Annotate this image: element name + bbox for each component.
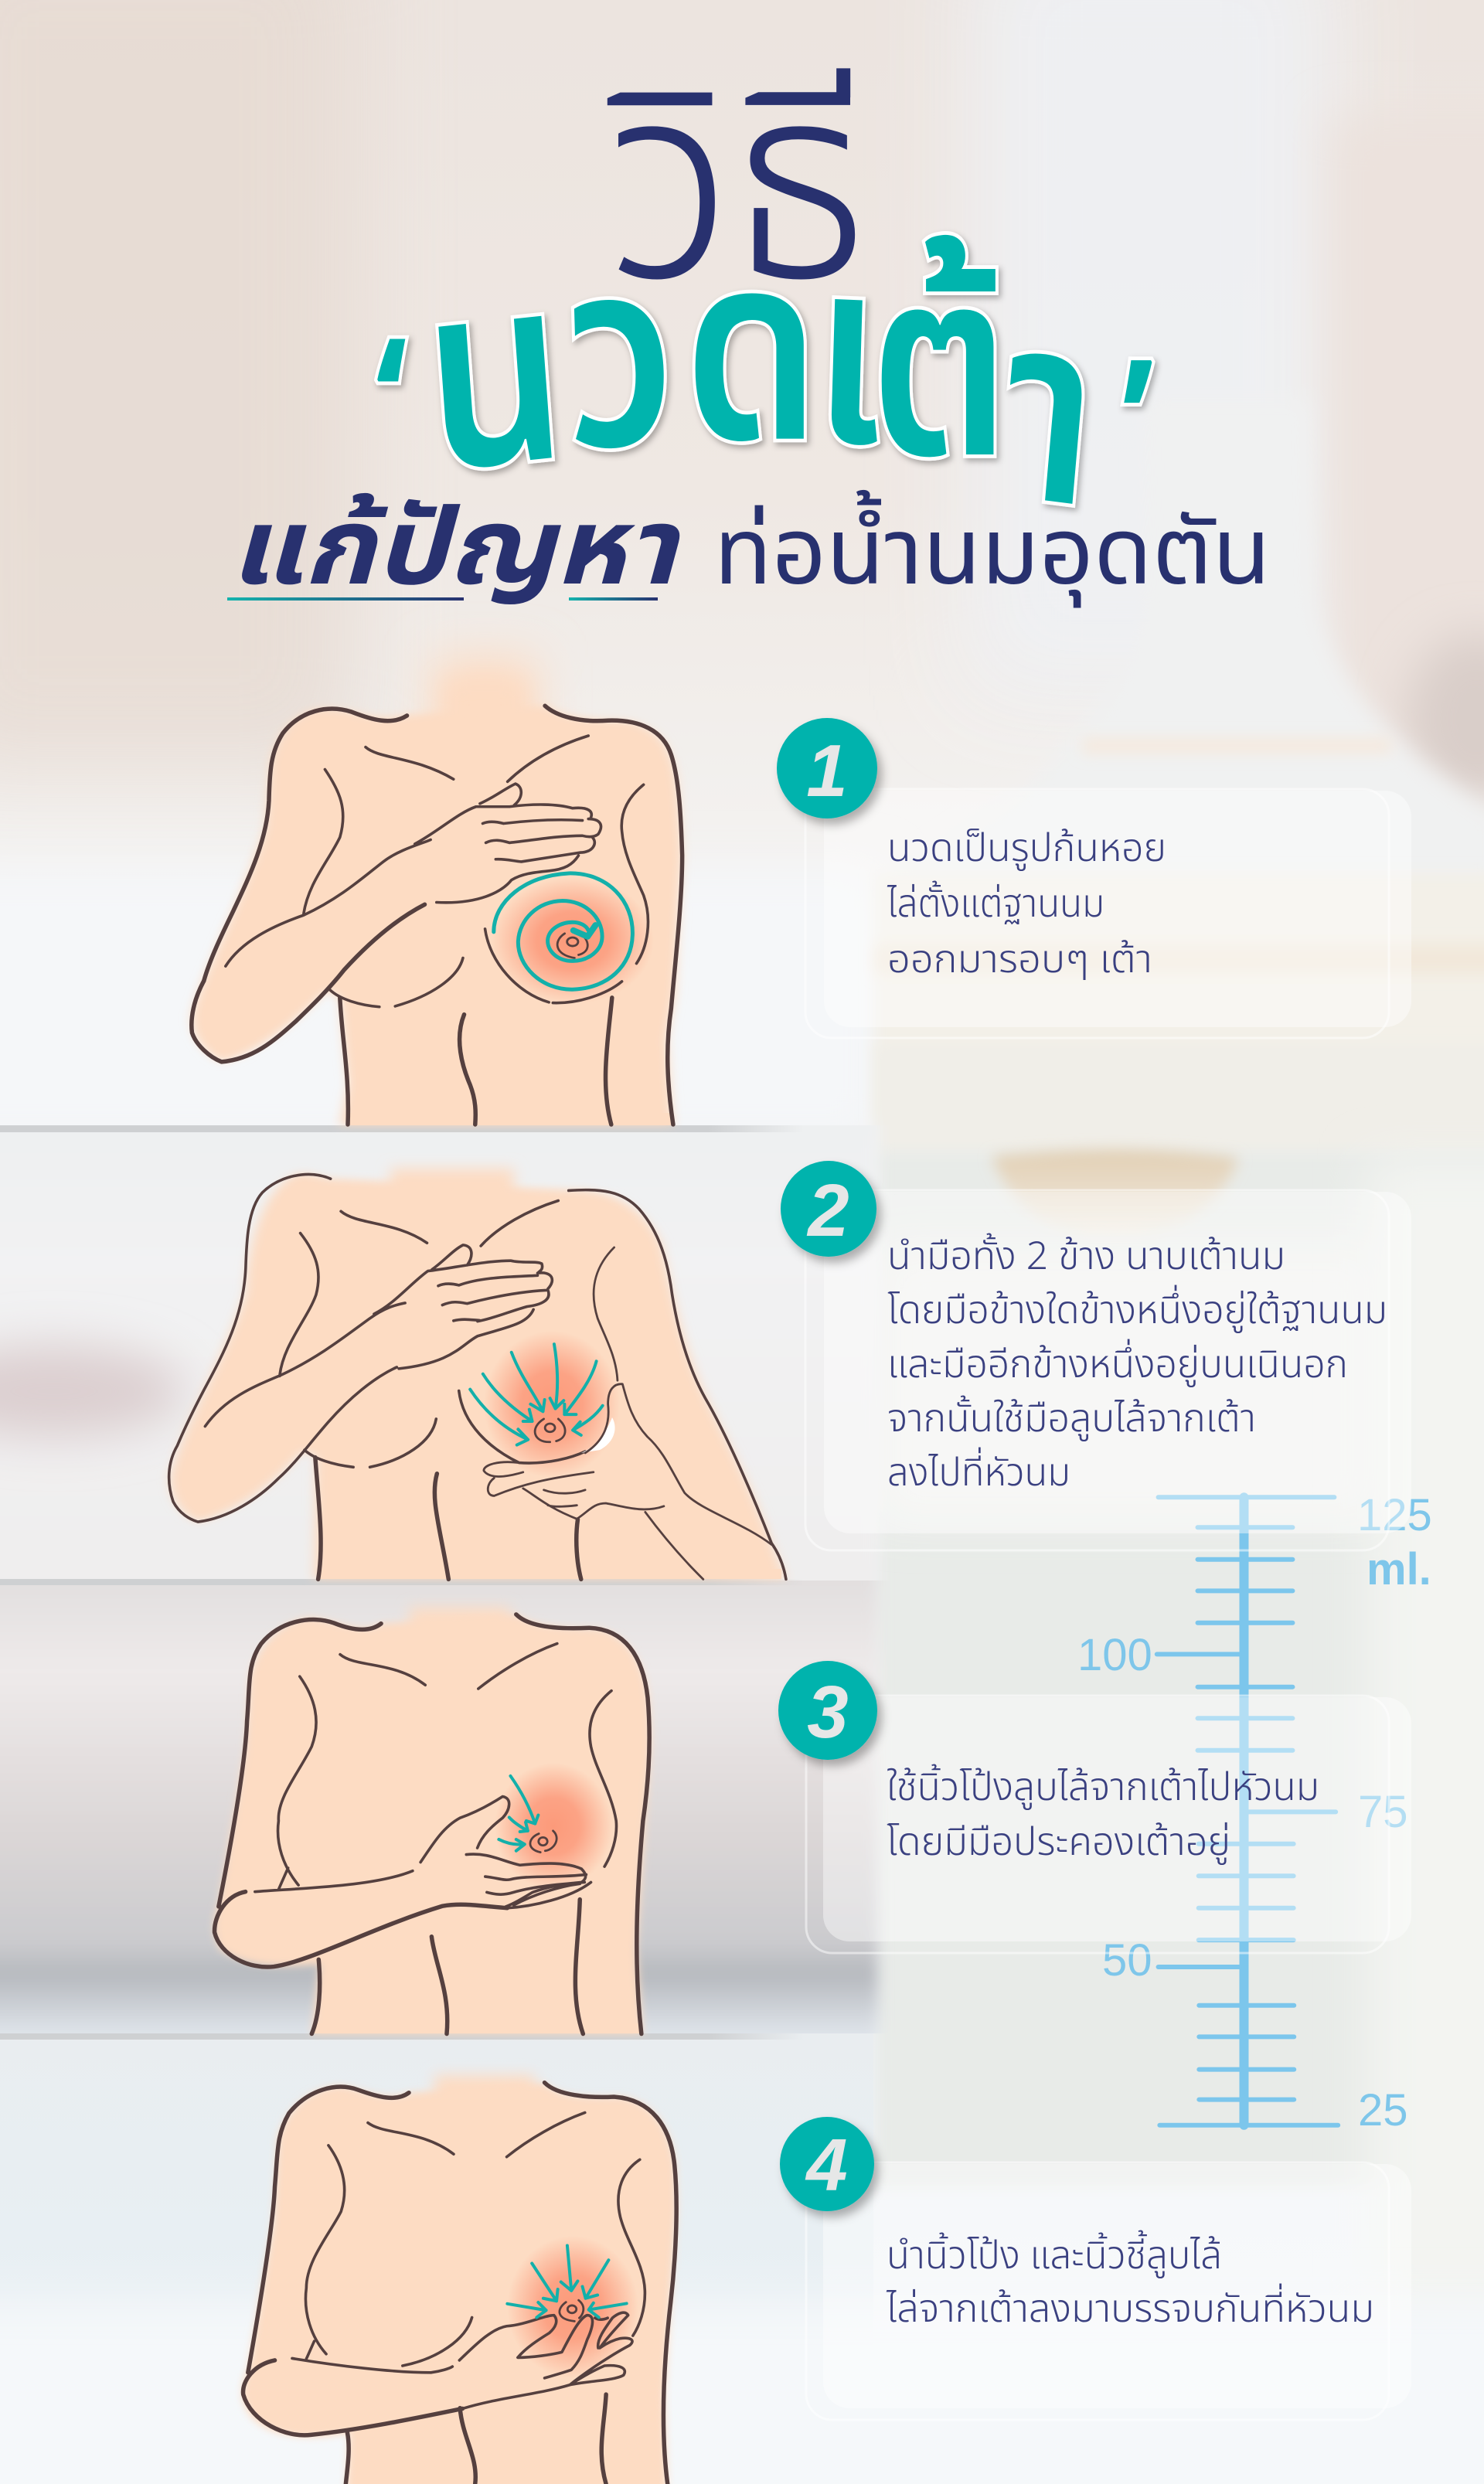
step 1 badge bbox=[777, 718, 877, 818]
step 1 badge: 1 bbox=[806, 730, 848, 812]
panel: step 4 bbox=[780, 2117, 1411, 2420]
figure 1: spiral massage illustration bbox=[192, 657, 682, 1125]
title: นวดเต้า with quotes: น bbox=[413, 182, 578, 587]
step 4 badge: 4 bbox=[805, 2124, 848, 2207]
step 2 badge bbox=[781, 1161, 876, 1257]
title underline accents bbox=[227, 597, 658, 601]
step 2 text: นำมือทั้ง 2 ข้าง นาบเต้านม bbox=[887, 1228, 1285, 1287]
bottle measuring scale bbox=[1077, 1490, 1432, 2135]
step 3 badge: 3 bbox=[807, 1671, 849, 1754]
step 2 text: จากนั้นใช้มือลูบไล้จากเต้า bbox=[887, 1390, 1256, 1449]
step 3 text: ใช้นิ้วโป้งลูบไล้จากเต้าไปหัวนม bbox=[887, 1759, 1319, 1818]
bottle measuring scale: 125 bbox=[1357, 1490, 1432, 1540]
title: ท่อน้ำนมอุดตัน: ท่อน้ำนมอุดตัน bbox=[714, 485, 1271, 625]
step 3 text bbox=[887, 1759, 1319, 1873]
step 2 badge: 2 bbox=[806, 1169, 849, 1252]
step 1 text: นวดเป็นรูปก้นหอย bbox=[887, 820, 1166, 879]
step 2 text: และมืออีกข้างหนึ่งอยู่บนเนินอก bbox=[887, 1336, 1348, 1395]
bottle measuring scale: ml. bbox=[1367, 1544, 1431, 1594]
step 2 text: โดยมือข้างใดข้างหนึ่งอยู่ใต้ฐานนม bbox=[887, 1282, 1387, 1341]
title: นวดเต้า with quotes bbox=[376, 164, 1154, 623]
step 2 text: ลงไปที่หัวนม bbox=[887, 1444, 1070, 1503]
figure 2: two-hand stroking illustration bbox=[169, 1169, 786, 1579]
figure 3: thumb stroking illustration bbox=[214, 1608, 651, 2033]
title: นวดเต้า with quotes: ‘ bbox=[376, 279, 407, 541]
bottle measuring scale: 50 bbox=[1102, 1935, 1152, 1985]
title: นวดเต้า with quotes: ด bbox=[684, 164, 820, 556]
step 1 text: ไล่ตั้งแต่ฐานนม bbox=[887, 876, 1104, 934]
step 2 text bbox=[887, 1228, 1387, 1503]
step 4 text: ไล่จากเต้าลงมาบรรจบกันที่หัวนม bbox=[886, 2281, 1374, 2339]
step 4 badge bbox=[780, 2117, 874, 2211]
title: แก้ปัญหา: แก้ปัญหา bbox=[230, 471, 681, 632]
title: นวดเต้า with quotes: ’ bbox=[1122, 300, 1154, 562]
step 4 text: นำนิ้วโป้ง และนิ้วชี้ลูบไล้ bbox=[887, 2227, 1222, 2286]
step 4 text bbox=[886, 2227, 1374, 2339]
panel: step 2 bbox=[781, 1161, 1411, 1550]
step 3 text: โดยมีมือประคองเต้าอยู่ bbox=[887, 1814, 1230, 1873]
bottle measuring scale: 100 bbox=[1077, 1630, 1152, 1680]
panel: step 3 bbox=[778, 1661, 1411, 1953]
title: วิธี: วิธี bbox=[605, 0, 869, 399]
title: นวดเต้า with quotes: เ bbox=[808, 166, 890, 561]
title: นวดเต้า with quotes: า bbox=[987, 221, 1112, 623]
bottle measuring scale: 25 bbox=[1358, 2085, 1408, 2135]
section divider shadows bbox=[0, 1125, 804, 2040]
step 1 text bbox=[887, 820, 1166, 990]
title: นวดเต้า with quotes: ต้ bbox=[870, 180, 1009, 572]
bottle measuring scale: 75 bbox=[1358, 1787, 1408, 1837]
step 3 badge bbox=[778, 1661, 877, 1760]
title: นวดเต้า with quotes: ว bbox=[560, 168, 681, 564]
step 1 text: ออกมารอบๆ เต้า bbox=[887, 931, 1152, 990]
figure 4: thumb and index finger illustration bbox=[243, 2075, 677, 2484]
panel: step 1 bbox=[777, 718, 1411, 1038]
